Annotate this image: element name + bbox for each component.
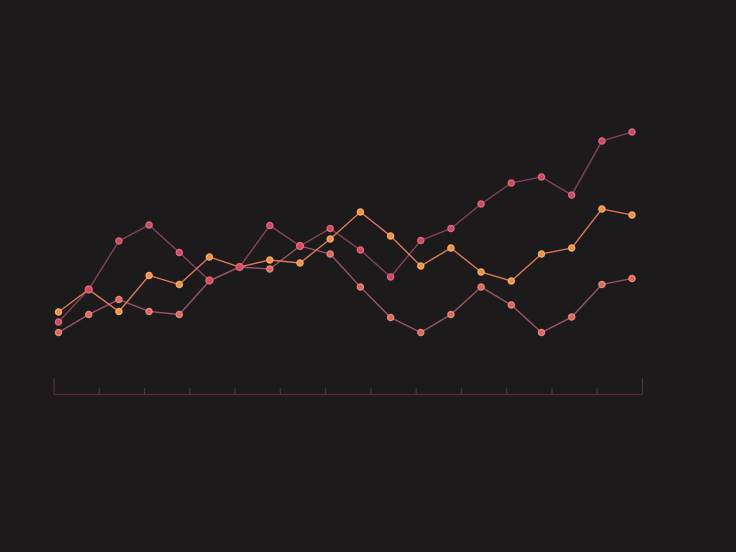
series: coral line <box>56 246 635 336</box>
overlapping markers where series meet <box>85 243 303 293</box>
x axis with ticks <box>54 378 642 394</box>
series: orange line <box>56 206 635 315</box>
series: crimson line <box>56 129 635 325</box>
